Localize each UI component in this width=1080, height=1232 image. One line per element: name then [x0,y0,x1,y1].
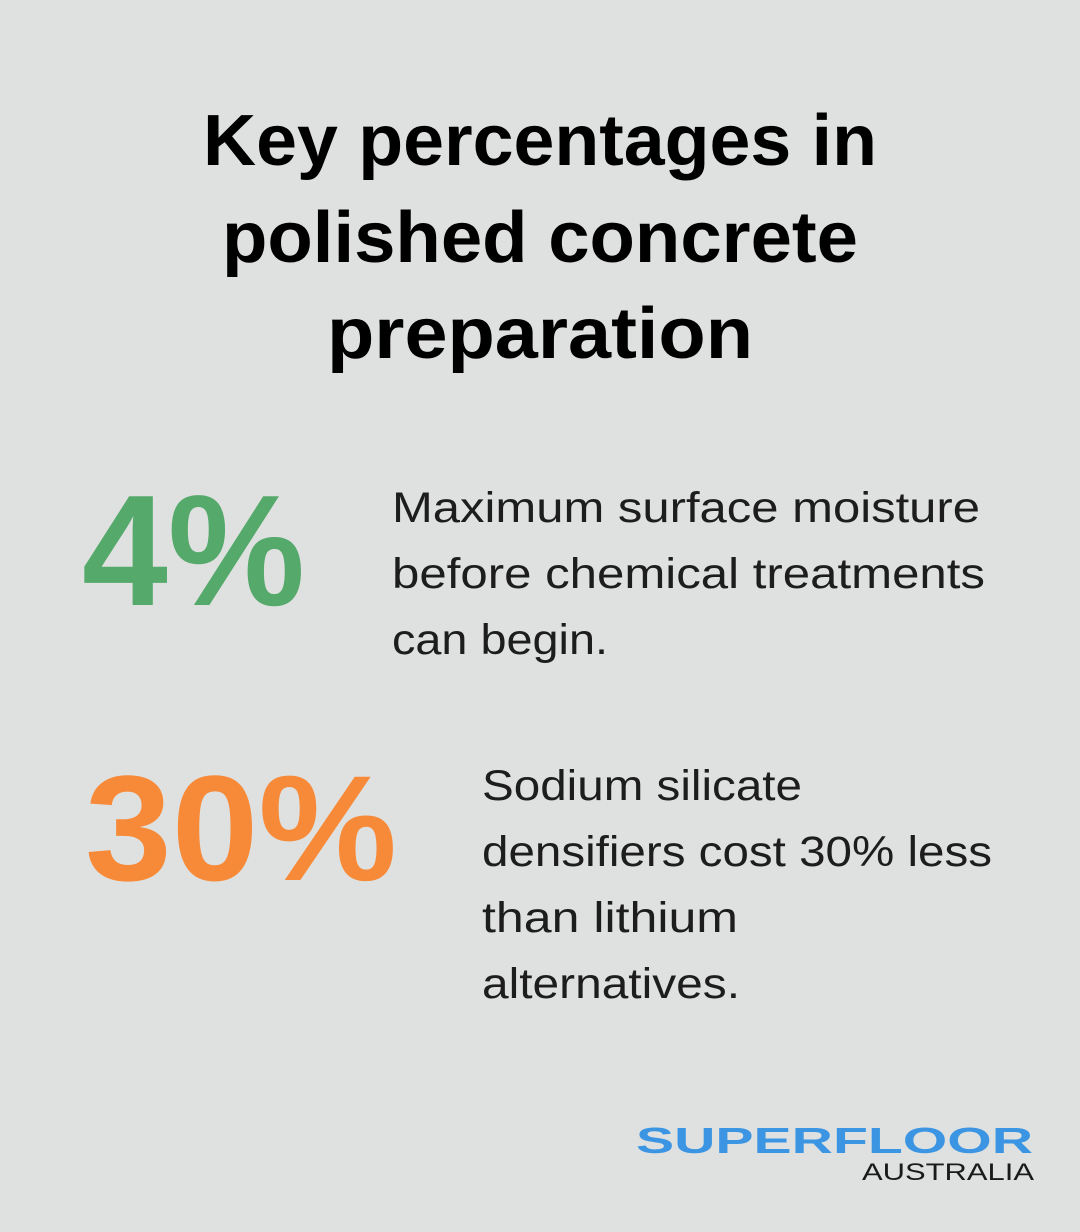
title: polished concrete [222,198,858,278]
text block: moisture [392,484,985,664]
title: Key percentages in [203,101,877,181]
stat: 30%: 30% [85,744,397,912]
text block: densifiers: alternatives. [482,960,740,1008]
text block: moisture: before chemical treatments [392,550,985,598]
text block: densifiers: densifiers cost 30% less [482,828,992,876]
title: preparation [327,294,753,374]
text block: densifiers: than lithium [482,894,738,942]
logo: AUSTRALIA [862,1159,1034,1186]
logo [636,1120,1034,1186]
logo: SUPERFLOOR [636,1120,1033,1161]
text block: moisture: can begin. [392,616,608,664]
text block: densifiers [482,762,992,1008]
title [203,101,877,374]
text block: moisture: Maximum surface moisture [392,484,980,532]
text block: densifiers: Sodium silicate [482,762,802,810]
stat: 4%: 4% [82,463,305,639]
